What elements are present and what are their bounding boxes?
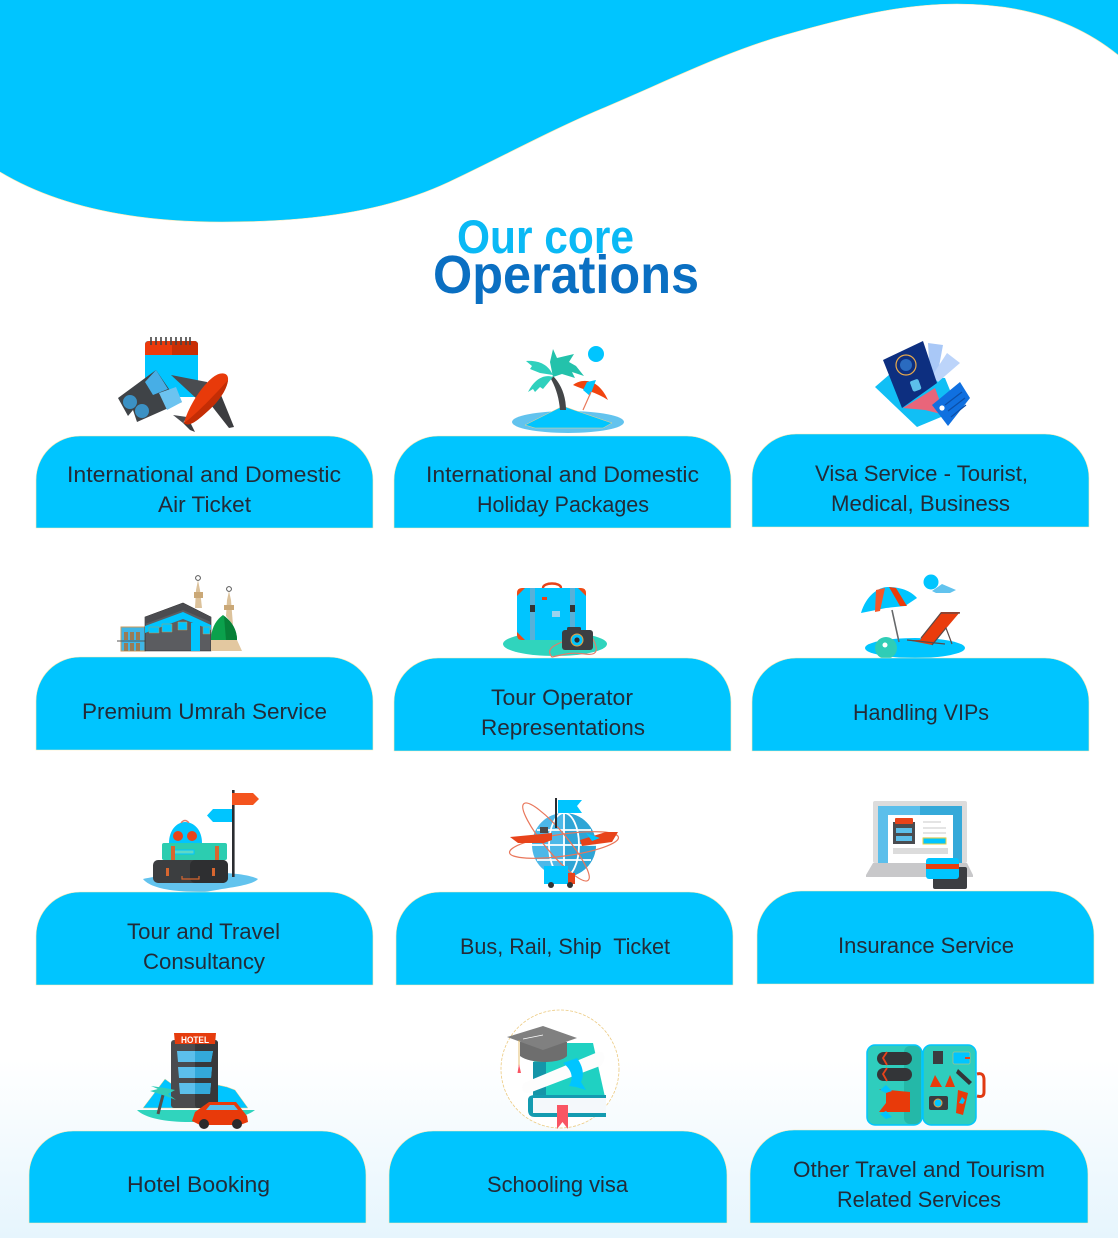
icon: calendar, tickets and plane [118, 337, 234, 432]
label: consultancy: Tour and Travel [127, 919, 280, 944]
icon: laptop with credit cards [866, 801, 973, 889]
panel: umrah [36, 576, 373, 750]
panel: schooling visa [389, 1010, 727, 1223]
header wave [0, 0, 1118, 222]
card: air ticket [36, 436, 373, 528]
label: holiday packages: Holiday Packages [477, 492, 649, 517]
panel: visa service [752, 341, 1089, 527]
label: consultancy: Consultancy [143, 949, 265, 974]
panel: consultancy [36, 790, 373, 985]
label: umrah: Premium Umrah Service [82, 699, 327, 724]
label: holiday packages [426, 462, 699, 517]
label: other services [793, 1157, 1045, 1212]
label: tour operator: Tour Operator [491, 685, 633, 710]
icon: hotel tower and red car [137, 1033, 255, 1129]
title line: Operations: Operations [433, 245, 699, 305]
card: visa service [752, 434, 1089, 527]
icon: passport, tickets and visa card [875, 341, 970, 427]
icon: suitcase and camera [503, 584, 607, 657]
card: schooling visa [389, 1131, 727, 1223]
label: air ticket: International and Domestic [67, 462, 341, 487]
icon: open travel case with packed items [867, 1045, 984, 1125]
label: air ticket [67, 462, 341, 517]
icon: luggage stack and signpost [143, 790, 259, 892]
label: tour operator [481, 685, 645, 740]
panel: holiday packages [394, 346, 731, 528]
label: consultancy [127, 919, 280, 974]
panel: insurance [757, 801, 1094, 984]
title line: Our core: Our core [457, 210, 634, 263]
icon: palm island with umbrella and sun [512, 346, 624, 433]
card: other services [750, 1130, 1088, 1223]
label: visa service [815, 461, 1028, 516]
label: other services: Related Services [837, 1187, 1001, 1212]
label: tour operator: Representations [481, 715, 645, 740]
panel: other services [750, 1045, 1088, 1223]
card: handling VIPs [752, 658, 1089, 751]
card: hotel booking [29, 1131, 366, 1223]
card: insurance [757, 891, 1094, 984]
icon: beach umbrella and deck chair [861, 574, 965, 659]
card: holiday packages [394, 436, 731, 528]
card: bus rail ship ticket [396, 892, 733, 985]
panel: air ticket [36, 337, 373, 528]
panel: handling VIPs [752, 574, 1089, 751]
icon: kaaba and green dome mosque [117, 576, 242, 651]
label: visa service: Visa Service - Tourist, [815, 461, 1028, 486]
card: consultancy [36, 892, 373, 985]
label: insurance: Insurance Service [838, 933, 1014, 958]
panel: tour operator [394, 584, 731, 751]
label: air ticket: Air Ticket [158, 492, 251, 517]
panel: bus rail ship ticket [396, 797, 733, 985]
label: hotel booking: Hotel Booking [127, 1172, 270, 1197]
label: visa service: Medical, Business [831, 491, 1010, 516]
card: umrah [36, 657, 373, 750]
icon: globe with ship, plane and bus [508, 797, 620, 888]
card: tour operator [394, 658, 731, 751]
label: holiday packages: International and Domestic [426, 462, 699, 487]
label: handling VIPs: Handling VIPs [853, 700, 989, 725]
icon: hotel tower and red car: HOTEL [181, 1035, 209, 1046]
icon: graduation cap, diploma and book [501, 1010, 619, 1129]
label: other services: Other Travel and Tourism [793, 1157, 1045, 1182]
label: bus rail ship ticket: Bus, Rail, Ship Ticket [460, 934, 670, 959]
label: schooling visa: Schooling visa [487, 1172, 629, 1197]
title [433, 210, 699, 305]
panel: hotel booking [29, 1033, 366, 1223]
